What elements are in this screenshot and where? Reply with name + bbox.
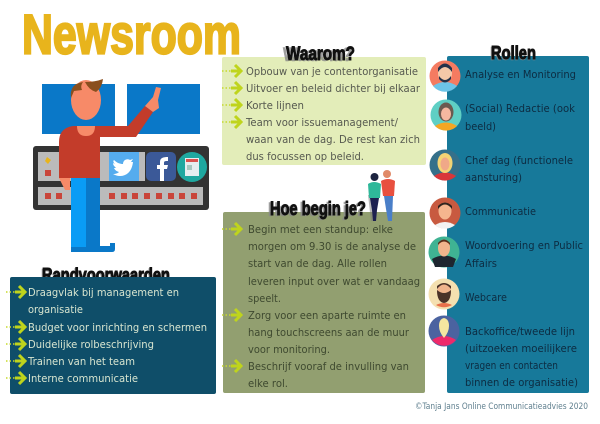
panel: Waarom xyxy=(222,43,426,165)
panel: Rollen xyxy=(447,56,589,393)
text: roles list: Affairs xyxy=(465,258,497,270)
text: Hoe begin je list: leveren input over wat er vandaag xyxy=(248,276,420,288)
heading: Rollen: Rollen xyxy=(490,44,536,64)
illustration: presenter at screens xyxy=(33,79,209,252)
icon: avatar webcare xyxy=(428,278,460,310)
text: Hoe begin je list: Begin met een standup: elke xyxy=(248,224,393,236)
text: Hoe begin je list: hang touchscreens aan de muur xyxy=(248,327,410,339)
heading: Hoe begin je: Hoe begin je? xyxy=(268,199,364,221)
text: Hoe begin je list xyxy=(248,224,420,390)
text: Hoe begin je list: elke rol. xyxy=(248,378,288,390)
text: roles list: beeld) xyxy=(465,121,496,133)
icon: two people talking xyxy=(368,170,395,221)
text: Randvoorwaarden list: Draagvlak bij management en xyxy=(28,287,179,299)
text: Waarom list: Uitvoer en beleid dichter bij elkaar xyxy=(246,83,421,95)
text: Randvoorwaarden list: Duidelijke rolbeschrijving xyxy=(28,339,154,351)
text: Randvoorwaarden list xyxy=(27,287,207,385)
text: roles list: vragen en contacten xyxy=(465,360,558,372)
text: Waarom list xyxy=(245,66,421,163)
text: Randvoorwaarden list: Interne communicatie xyxy=(28,373,138,385)
text: roles list: Chef dag (functionele xyxy=(465,155,573,167)
text: Waarom list: Korte lijnen xyxy=(246,100,304,112)
text: roles list: Backoffice/tweede lijn xyxy=(465,326,575,338)
panel: Randvoorwaarden xyxy=(6,277,216,394)
text: Randvoorwaarden list: Trainen van het team xyxy=(27,356,135,368)
text: Hoe begin je list: voor monitoring. xyxy=(248,344,330,356)
text: roles list xyxy=(465,69,583,389)
title: Newsroom xyxy=(22,2,241,66)
text: Hoe begin je list: speelt. xyxy=(248,293,281,305)
text: roles list: Analyse en Monitoring xyxy=(465,69,576,81)
heading: Rollen: Rollen xyxy=(491,43,536,63)
icon: avatar chef dag xyxy=(430,150,460,181)
text: Waarom list: dus focussen op beleid. xyxy=(246,151,364,163)
icon: avatar backoffice xyxy=(428,316,460,346)
icon: avatar analyse xyxy=(430,60,460,92)
text: roles list: (Social) Redactie (ook xyxy=(465,103,575,115)
text: Hoe begin je list: Beschrijf vooraf de invulling van xyxy=(248,361,409,373)
text: roles list: Webcare xyxy=(465,292,507,304)
icon: avatar redactie xyxy=(430,100,462,131)
text: Waarom list: Opbouw van je contentorganisatie xyxy=(246,66,418,78)
text: Hoe begin je list: Zorg voor een aparte ruimte en xyxy=(248,310,406,322)
panel: Hoe begin je xyxy=(222,212,425,393)
heading: Randvoorwaarden: Randvoorwaarden xyxy=(41,265,169,286)
icon: avatar woordvoering xyxy=(428,236,460,268)
heading: Waarom: Waarom? xyxy=(283,44,352,66)
icon: avatar communicatie xyxy=(430,198,460,229)
text: roles list: aansturing) xyxy=(465,172,522,184)
text: roles list: Woordvoering en Public xyxy=(465,240,583,252)
text: roles list: Communicatie xyxy=(465,206,536,218)
text: Hoe begin je list: start van de dag. Alle rollen xyxy=(248,258,387,270)
text: Waarom list: waan van de dag. De rest kan zich xyxy=(246,134,420,146)
text: roles list: binnen de organisatie) xyxy=(465,377,578,389)
heading: Hoe begin je: Hoe begin je? xyxy=(270,198,366,220)
text: Randvoorwaarden list: Budget voor inrichting en schermen xyxy=(28,322,207,334)
heading: Waarom: Waarom? xyxy=(286,43,355,65)
text: Randvoorwaarden list: organisatie xyxy=(28,304,83,316)
text: Waarom list: Team voor issuemanagement/ xyxy=(245,117,399,129)
text: Hoe begin je list: morgen om 9.30 is de analyse de xyxy=(248,241,416,253)
text: roles list: (uitzoeken moeilijkere xyxy=(465,343,577,355)
heading: Randvoorwaarden: Randvoorwaarden xyxy=(42,264,170,285)
